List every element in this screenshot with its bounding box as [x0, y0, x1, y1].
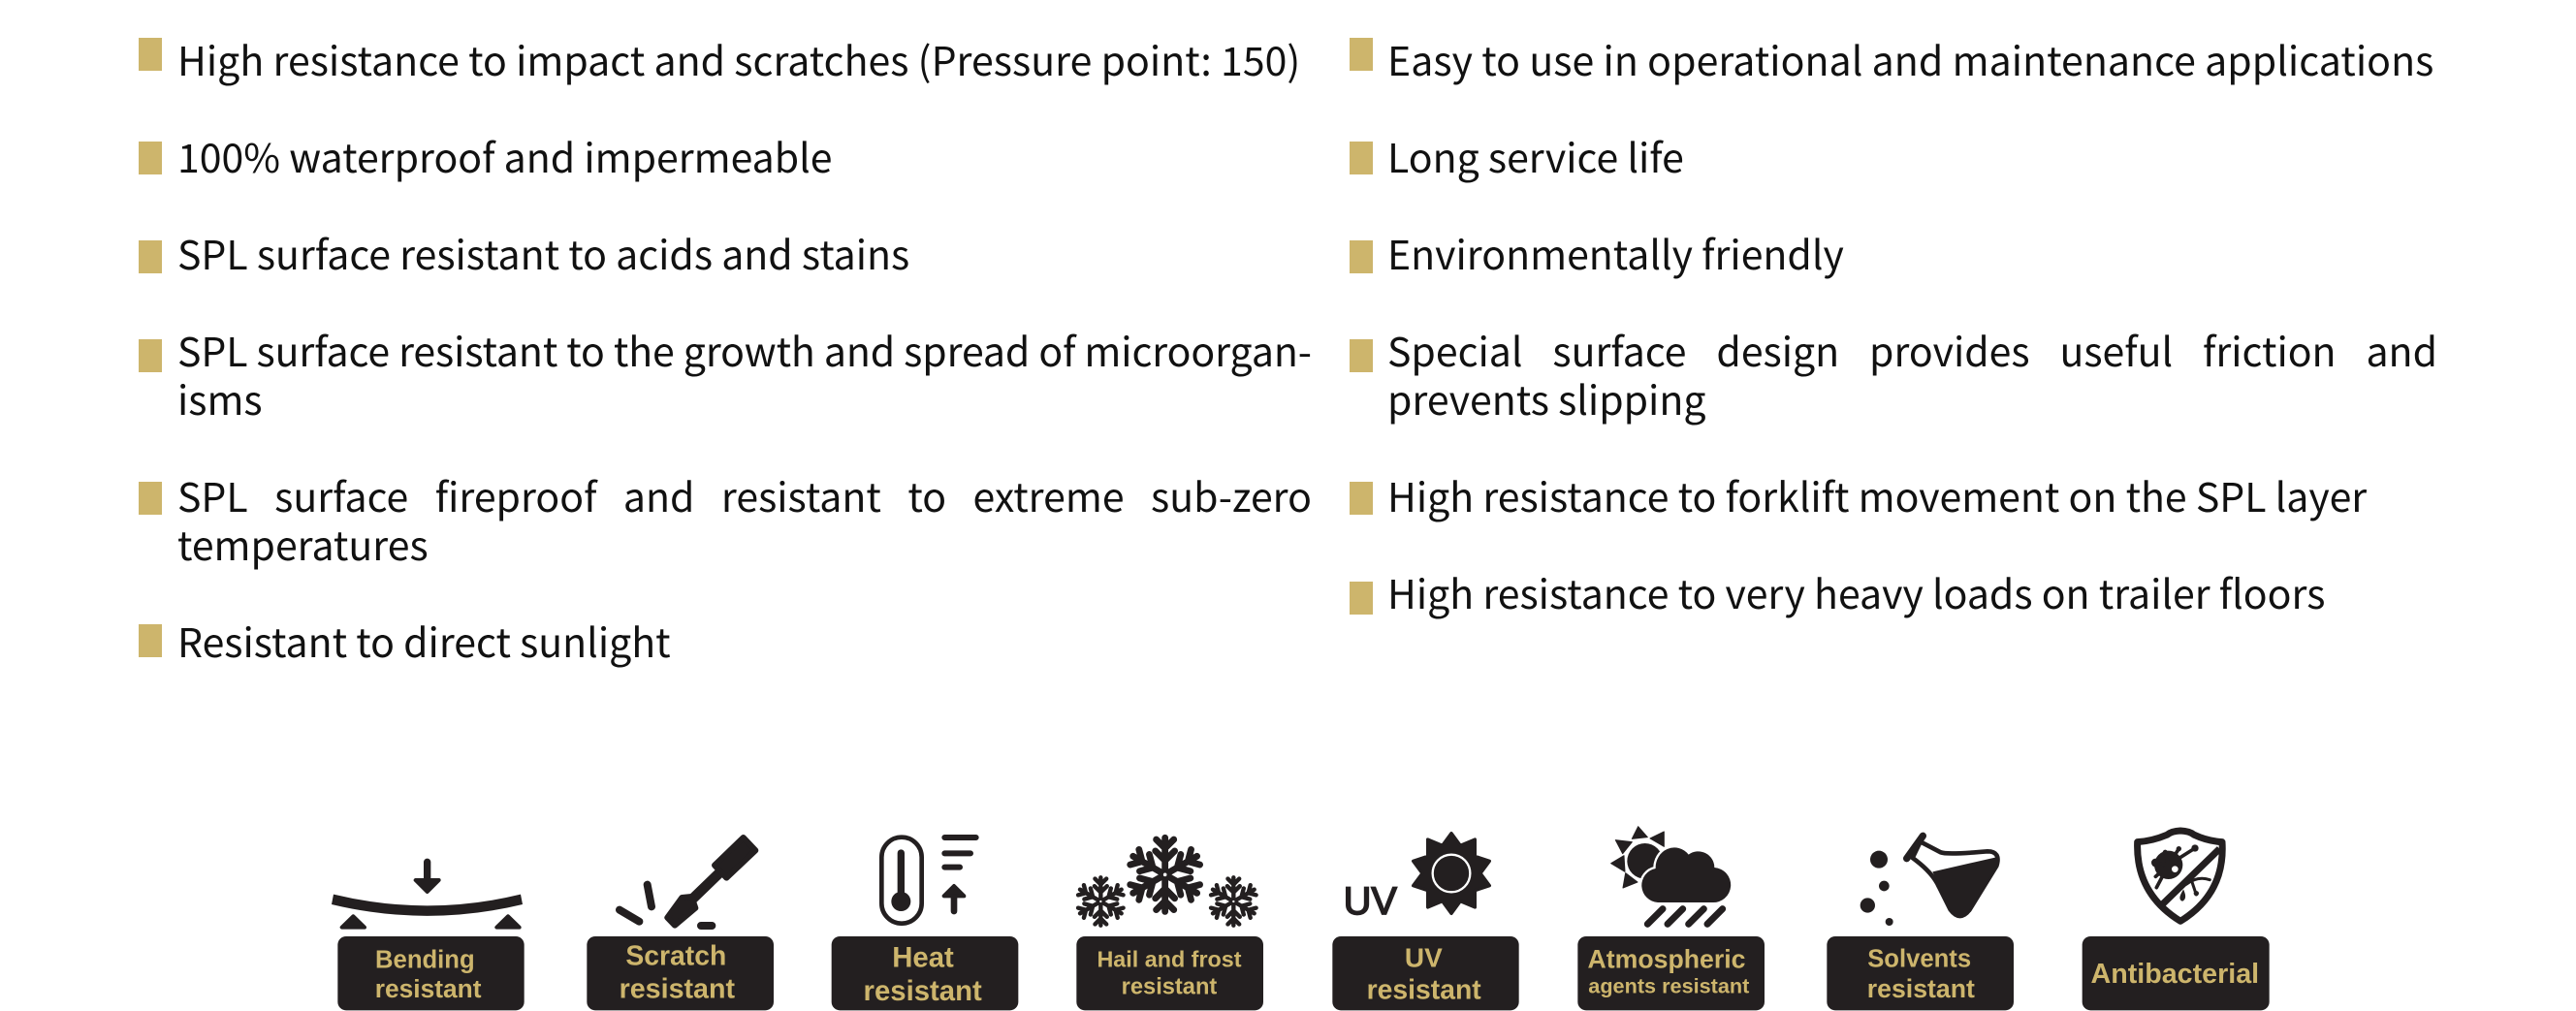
icon and label: scratch resistant — [587, 837, 774, 1010]
label: UV resistant: resistant — [1367, 975, 1481, 1006]
label: scratch resistant: Scratch — [625, 941, 726, 972]
label: hail and frost resistant: resistant — [1122, 974, 1217, 999]
label: atmospheric agents resistant: Atmospheric — [1588, 945, 1746, 974]
bullet: acids and stains: SPL surface resistant to acids and stains — [177, 223, 909, 281]
icon and label: atmospheric agents resistant — [1577, 827, 1765, 1010]
icon: antibacterial shield — [2138, 831, 2222, 921]
label: UV resistant — [1332, 936, 1519, 1010]
bullet: impact and scratches: High resistance to impact and scratches (Pressure point: 150) — [177, 29, 1300, 87]
bullet: service life: Long service life — [1387, 126, 1684, 184]
label: heat resistant: Heat — [892, 941, 954, 973]
label: atmospheric agents resistant — [1577, 936, 1765, 1010]
icon: bending beam — [332, 862, 523, 928]
label: scratch resistant — [587, 936, 774, 1010]
icon: UV sun: UV — [1344, 880, 1397, 923]
bullet: fireproof — [139, 465, 1312, 572]
label: antibacterial — [2083, 936, 2270, 1010]
label: solvents resistant — [1827, 936, 2014, 1010]
bullet: easy to use: Easy to use in operational and maintenance applications — [1387, 29, 2433, 87]
icon: snowflakes — [1077, 837, 1257, 926]
bullet: fireproof: SPL surface fireproof and resistant to extreme sub-zero — [177, 465, 1312, 523]
label: solvents resistant: Solvents — [1867, 945, 1971, 972]
label: scratch resistant: resistant — [620, 973, 736, 1004]
bullet: fireproof: temperatures — [177, 514, 429, 572]
label: bending resistant: resistant — [375, 974, 482, 1003]
icon and label: antibacterial — [2083, 831, 2270, 1010]
icon: UV sun — [1344, 834, 1489, 923]
label: UV resistant: UV — [1405, 942, 1443, 972]
bullet: sunlight: Resistant to direct sunlight — [177, 611, 671, 669]
icon: sun, cloud and rain — [1611, 827, 1731, 924]
bullet: forklift: High resistance to forklift movement on the SPL layer — [1387, 465, 2367, 523]
label: hail and frost resistant — [1076, 936, 1263, 1010]
icon and label: hail and frost resistant — [1076, 837, 1263, 1010]
panel: left feature list — [139, 29, 1312, 669]
label: heat resistant: resistant — [864, 975, 982, 1007]
icon and label: solvents resistant — [1827, 836, 2014, 1010]
label: solvents resistant: resistant — [1867, 974, 1975, 1003]
icon and label: bending resistant — [332, 862, 525, 1010]
icon: scraper and marks — [620, 837, 755, 926]
bullet: microorganisms: SPL surface resistant to the growth and spread of microorgan- — [177, 320, 1312, 378]
bullet: special surface: Special surface design provides useful friction and — [1387, 320, 2437, 378]
label: antibacterial: Antibacterial — [2091, 959, 2259, 990]
label: hail and frost resistant: Hail and frost — [1097, 947, 1242, 972]
bullet: microorganisms: isms — [177, 368, 263, 427]
bullet: environmentally friendly: Environmentally friendly — [1387, 223, 1844, 281]
label: atmospheric agents resistant: agents resistant — [1588, 973, 1749, 997]
icon: thermometer with arrow — [881, 837, 976, 924]
icon: pouring flask — [1860, 836, 1998, 926]
label: heat resistant — [832, 936, 1018, 1010]
bullet: special surface — [1350, 320, 2437, 427]
panel: right feature list — [1350, 29, 2437, 620]
icon and label: heat resistant — [832, 837, 1018, 1010]
bullet: waterproof: 100% waterproof and impermeable — [177, 126, 832, 184]
bullet: microorganisms — [139, 320, 1312, 427]
icon and label: UV resistant — [1332, 834, 1519, 1010]
bullet: heavy loads: High resistance to very heavy loads on trailer floors — [1387, 562, 2325, 620]
bullet: special surface: prevents slipping — [1387, 368, 1705, 427]
label: bending resistant: Bending — [375, 946, 475, 973]
label: bending resistant — [337, 936, 525, 1010]
